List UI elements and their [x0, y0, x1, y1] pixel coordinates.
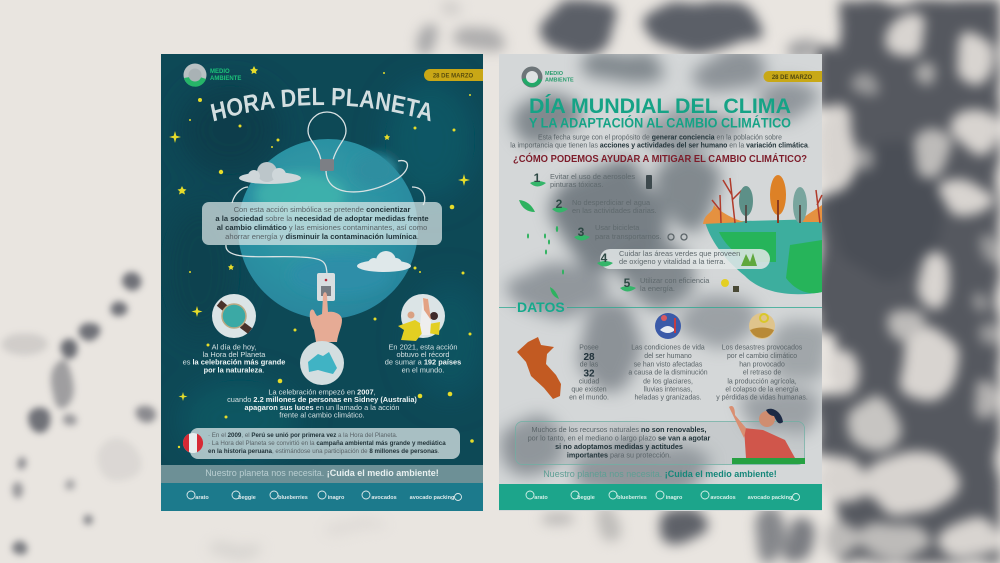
slogan: Nuestro planeta nos necesita. ¡Cuida el medio ambiente!	[543, 469, 777, 479]
text: disasters: la producción agrícola,	[727, 378, 797, 386]
map: Peru	[517, 337, 561, 399]
title	[529, 95, 791, 130]
text: cities	[569, 344, 609, 402]
item 3: para transportarnos.	[595, 232, 662, 241]
item 2: No desperdiciar el agua	[572, 198, 651, 207]
logo: Medio Ambiente	[522, 66, 574, 88]
text: record: en el mundo.	[402, 366, 444, 374]
text: living conditions: de los glaciares,	[643, 378, 693, 386]
illustration: man	[729, 406, 805, 464]
shadows: bottom strip	[205, 505, 809, 563]
text: living conditions: se han visto afectadas	[634, 362, 703, 368]
panel: intro text: Con esta acción simbólica se pretende concientizar	[234, 205, 410, 214]
text: cities: Posee	[579, 344, 599, 352]
cloud right	[357, 251, 411, 272]
date pill: 28 DE MARZO	[433, 74, 474, 80]
title: Y LA ADAPTACIÓN AL CAMBIO CLIMÁTICO	[529, 116, 791, 130]
text: disasters: han provocado	[739, 362, 785, 368]
footer logos: arato	[534, 495, 548, 501]
text: disasters: y pérdidas de vidas humanas.	[716, 394, 808, 402]
item 2: 2	[556, 197, 563, 211]
panel: natural resources: si no adoptamos medidas y actitudes	[555, 442, 683, 451]
item 2: en las actividades diarias.	[572, 206, 657, 215]
text: celebration: es la celebración más grande	[183, 358, 285, 366]
text: living conditions	[628, 344, 708, 402]
heading: DATOS: DATOS	[517, 299, 565, 315]
text: disasters	[716, 344, 808, 402]
text: introduction: Esta fecha surge con el propósito de generar conciencia en la población sobre	[538, 134, 782, 142]
footer logos: avocado packing	[748, 495, 792, 501]
item 5: la energía.	[640, 284, 675, 293]
text: history: apagaron sus luces en un llamado a la acción	[245, 403, 399, 412]
text: record: obtuvo el récord	[396, 350, 450, 359]
icon: drought	[749, 313, 775, 339]
date pill	[764, 71, 822, 82]
panel: natural resources	[516, 422, 804, 464]
stars	[169, 66, 474, 448]
poster: Día Mundial del Clima	[499, 49, 830, 511]
footer logos: blueberries	[278, 495, 308, 501]
footer logos: avocados	[371, 495, 397, 501]
text: celebration	[183, 342, 285, 374]
text: history: cuando 2.2 millones de personas en Sidney (Australia)	[227, 395, 417, 404]
text: cities: de las	[580, 362, 599, 368]
logo: Medio Ambiente: MEDIO	[545, 71, 564, 77]
icon: watch circle	[212, 294, 256, 338]
item 1: 1	[534, 171, 541, 185]
panel: Peru: · En el 2009, el Perú se unió por primera vez a la Hora del Planeta.	[208, 432, 398, 439]
item 1	[530, 171, 652, 189]
date pill	[424, 69, 483, 81]
text: living conditions: del ser humano	[644, 353, 692, 360]
item 4: 4	[601, 251, 608, 265]
logo: Medio Ambiente	[184, 64, 241, 87]
footer logos: arato	[195, 495, 209, 501]
illustration: landscape	[703, 175, 822, 294]
item 1: Evitar el uso de aerosoles	[550, 172, 635, 181]
text: disasters: Los desastres provocados	[722, 344, 803, 352]
item 3: 3	[578, 225, 585, 239]
footer logos: avocado packing	[410, 495, 454, 501]
text: record: de sumar a 192 países	[385, 358, 461, 366]
poster background	[499, 49, 830, 511]
item 2	[552, 197, 657, 215]
leaves	[519, 200, 564, 299]
bulb and wire	[226, 112, 425, 274]
text: history	[227, 388, 417, 420]
text: disasters: el colapso de la energía	[725, 386, 799, 394]
text: history: La celebración empezó en 2007,	[268, 388, 376, 396]
text: cities: en el mundo.	[569, 394, 609, 402]
poster background	[161, 54, 483, 465]
panel: Peru	[183, 428, 460, 459]
text: cities: ciudad	[579, 378, 599, 386]
footer logos: beggie	[577, 495, 595, 501]
text: celebration: por la naturaleza.	[204, 366, 264, 374]
logo: Medio Ambiente: AMBIENTE	[545, 78, 574, 84]
text: living conditions: a causa de la disminución	[628, 370, 708, 376]
plug and hand	[310, 273, 342, 342]
title: DÍA MUNDIAL DEL CLIMA	[529, 95, 791, 118]
slogan band: Nuestro planeta nos necesita. ¡Cuida el medio ambiente!	[205, 468, 439, 478]
text: introduction	[510, 134, 810, 150]
poster: Hora del Planeta	[161, 54, 483, 511]
logo: Medio Ambiente: AMBIENTE	[210, 76, 241, 82]
item 3	[574, 223, 687, 241]
item 3: Usar bicicleta	[595, 223, 640, 232]
text: cities: que existen	[571, 386, 607, 394]
item 1: pinturas tóxicas.	[550, 180, 603, 189]
icon: people circle	[398, 294, 445, 341]
panel: Peru: en la historia peruana, estimándose una participación de 8 millones de personas.	[208, 448, 440, 455]
panel: Peru: · La Hora del Planeta se convirtió en la campaña ambiental más grande y mediática	[208, 440, 446, 447]
footer logos	[161, 483, 483, 511]
pill behind item 4	[600, 249, 770, 269]
text: living conditions: heladas y granizadas.	[634, 394, 702, 402]
item 5: Utilizar con eficiencia	[640, 276, 710, 285]
item 4: Cuidar las áreas verdes que proveen	[619, 249, 740, 258]
text: cities: 32	[583, 368, 595, 380]
list: mitigation actions	[530, 171, 757, 293]
shadows: left side	[2, 271, 156, 557]
panel: intro text	[202, 202, 442, 245]
text: disasters: por el cambio climático	[727, 353, 797, 360]
item 4: de oxígeno y vitalidad a la tierra.	[619, 257, 725, 266]
logo: Medio Ambiente: MEDIO	[210, 69, 230, 75]
footer logos: inagro	[666, 495, 683, 501]
text: living conditions: Las condiciones de vida	[631, 344, 705, 352]
text: celebration: Al día de hoy,	[212, 342, 256, 352]
shadows: top strip	[413, 0, 814, 60]
date pill: 28 DE MARZO	[772, 75, 812, 81]
text: disasters: el retraso de	[743, 370, 781, 376]
text: record: En 2021, esta acción	[388, 342, 458, 352]
panel: intro text: al cambio climático y las emisiones contaminantes, así como	[217, 223, 427, 232]
panel: natural resources: Muchos de los recursos naturales no son renovables,	[532, 425, 706, 434]
icon: glaciers	[655, 313, 681, 339]
footer logos: inagro	[328, 495, 345, 501]
slogan band	[161, 465, 483, 483]
footer logos: beggie	[238, 495, 256, 501]
item 5	[620, 276, 739, 293]
footer logos: avocados	[710, 495, 736, 501]
text: cities: 28	[583, 352, 595, 363]
text: celebration: la Hora del Planeta	[203, 350, 266, 359]
shadows: wall	[205, 0, 1000, 563]
panel: natural resources: por lo tanto, en el mediano o largo plazo se van a agotar	[528, 434, 710, 442]
text: history: frente al cambio climático.	[279, 410, 365, 420]
heading: question: ¿CÓMO PODEMOS AYUDAR A MITIGAR EL CAMBIO CLIMÁTICO?	[513, 152, 807, 165]
icon: Peru flag	[183, 433, 203, 453]
item 4	[597, 249, 757, 266]
shadows: right side	[815, 0, 1000, 563]
item 5: 5	[624, 276, 631, 290]
footer logos: blueberries	[617, 495, 647, 501]
title: HORA DEL PLANETA	[210, 88, 430, 122]
panel: natural resources: importantes para su protección.	[567, 450, 671, 460]
footer logos	[499, 484, 822, 510]
icon: Australia circle	[300, 341, 344, 385]
text: record	[385, 342, 461, 374]
cloud left	[239, 162, 301, 184]
text: living conditions: lluvias intensas,	[644, 386, 692, 394]
panel: intro text: ahorrar energía y disminuir la contaminación lumínica.	[225, 232, 419, 241]
panel: intro text: a la sociedad sobre la necesidad de adoptar medidas frente	[215, 214, 429, 223]
text: introduction: la importancia que tienen las acciones y actividades del ser humano en la variación climática.	[510, 142, 810, 150]
globe	[238, 139, 418, 319]
